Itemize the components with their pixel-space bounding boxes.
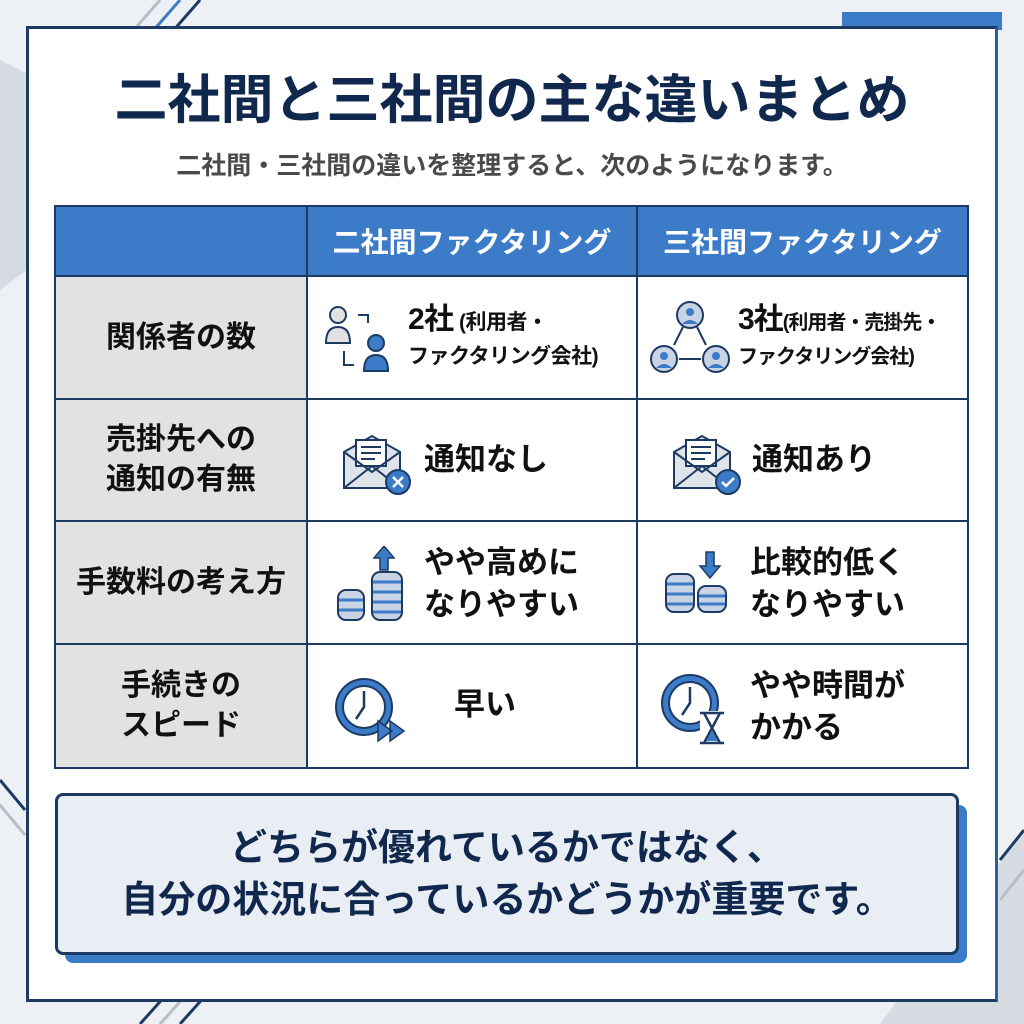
row labels: 通知の有無 xyxy=(106,463,256,496)
row labels: 関係者の数 xyxy=(106,320,256,354)
header: 三社間: 三社間ファクタリング xyxy=(663,227,942,258)
row 4: speed: かかる xyxy=(750,710,843,745)
icon: clock fast-forward xyxy=(335,678,406,742)
row 3: fees: なりやすい xyxy=(424,587,579,622)
header: 二社間: 二社間ファクタリング xyxy=(333,227,611,258)
row 2: notification xyxy=(308,400,967,520)
row labels: 手数料の考え方 xyxy=(76,566,286,598)
row labels xyxy=(56,277,306,767)
row labels: スピード xyxy=(121,709,241,742)
callout: conclusion box: どちらが優れているかではなく、 xyxy=(230,827,784,868)
row 1: parties xyxy=(308,277,967,398)
row labels: 売掛先への xyxy=(106,423,256,456)
icon: coins up arrow xyxy=(337,546,403,621)
row labels: 手続きの xyxy=(121,669,241,702)
row 2: notification: 通知あり xyxy=(752,442,876,477)
row 3: fees: 比較的低く xyxy=(750,545,905,580)
callout: conclusion box: 自分の状況に合っているかどうかが重要です。 xyxy=(121,879,893,920)
row 4: speed xyxy=(308,645,967,767)
row 3: fees: やや高めに xyxy=(424,545,579,580)
icon: three people xyxy=(650,301,730,373)
title: 二社間と三社間の主な違いまとめ xyxy=(114,71,910,130)
icon: envelope check xyxy=(673,434,741,495)
row 3: fees xyxy=(308,522,967,643)
callout: conclusion box xyxy=(55,793,967,963)
header: 三社間 xyxy=(638,207,967,275)
header: 二社間 xyxy=(308,207,636,275)
icon: two people xyxy=(325,306,389,372)
row 2: notification: 通知なし xyxy=(424,442,548,477)
row 1: parties: 2社 (利用者・ xyxy=(408,303,548,336)
row 1: parties: 3社(利用者・売掛先・ xyxy=(738,303,940,336)
row 1: parties: ファクタリング会社) xyxy=(738,346,914,368)
icon: envelope x xyxy=(343,434,411,495)
subtitle: 二社間・三社間の違いを整理すると、次のようになります。 xyxy=(176,152,848,180)
row 1: parties: ファクタリング会社) xyxy=(408,345,598,368)
header row xyxy=(56,207,967,275)
row 3: fees: なりやすい xyxy=(750,587,905,622)
icon: clock hourglass xyxy=(661,674,724,744)
row 4: speed: 早い xyxy=(454,687,516,722)
comparison table xyxy=(54,205,969,769)
row 4: speed: やや時間が xyxy=(750,668,905,703)
icon: coins down arrow xyxy=(665,551,727,613)
